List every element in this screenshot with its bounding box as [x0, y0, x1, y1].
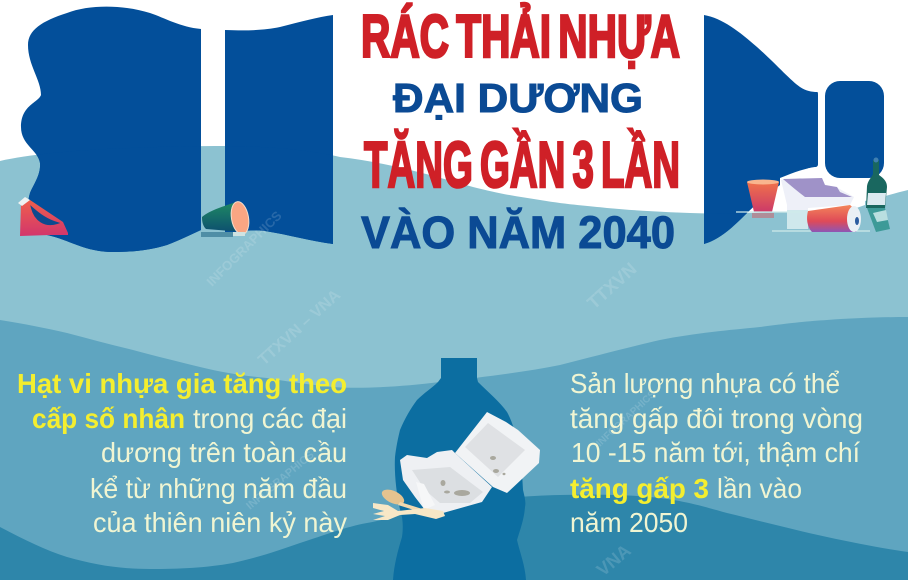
left text block: dương trên toàn cầu [101, 437, 347, 468]
icon: foam takeaway box with cutlery [373, 412, 540, 520]
right text block: tăng gấp đôi trong vòng [570, 403, 863, 434]
bottle cap [825, 81, 884, 178]
right text block: Sản lượng nhựa có thể [570, 368, 840, 399]
watermarks [204, 208, 658, 580]
box base [400, 450, 492, 513]
watermarks: INFOGRAPHICS [244, 449, 317, 512]
title line 2: ĐẠI DƯƠNG [393, 75, 643, 121]
left text block: Hạt vi nhựa gia tăng theo [17, 368, 347, 399]
title line 3: TĂNG GẦN 3 LẦN [364, 128, 680, 201]
left text block: của thiên niên kỷ này [93, 507, 347, 538]
mid water layer [0, 317, 908, 580]
right text block: tăng gấp 3 [570, 473, 709, 504]
watermarks: TTXVN – VNA [255, 286, 344, 369]
watermarks: INFOGRAPHICS [204, 208, 285, 289]
title line 1: RÁC THẢI NHỰA [361, 3, 680, 70]
icon: green cup on its side [201, 200, 251, 237]
left text block [17, 368, 347, 538]
icon: red plastic jug [18, 197, 68, 236]
right text block [570, 368, 863, 538]
deep water layer [0, 495, 908, 580]
bottle shoulder right segment [704, 15, 818, 244]
watermarks: TTXVN [583, 259, 641, 313]
watermarks: VNA [593, 540, 635, 580]
submerged bottle tone [28, 154, 747, 252]
spoon [380, 486, 432, 515]
green glass bottle [866, 158, 890, 232]
base interior [412, 467, 483, 503]
right text block: năm 2050 [570, 507, 688, 538]
bottle body left segment [21, 7, 201, 252]
lid interior [465, 423, 525, 477]
bottle silhouette: large cut-out bottle behind title [21, 7, 884, 252]
white halo behind trash [780, 167, 865, 212]
central bottle silhouette [393, 358, 526, 580]
fork [373, 503, 445, 520]
left text block: kể từ những năm đầu [90, 473, 347, 504]
food stains [440, 456, 506, 496]
right text block: 10 -15 năm tới, thậm chí [571, 437, 860, 468]
left text block: trong các đại [193, 403, 347, 434]
red cup [747, 180, 779, 218]
main title [361, 3, 680, 258]
fallen roll/can [807, 205, 861, 232]
watermarks: INFOGRAPHICS [595, 389, 658, 449]
title line 4: VÀO NĂM 2040 [361, 207, 675, 258]
left text block: cấp số nhân [32, 403, 185, 434]
foam box [781, 178, 854, 229]
water glints [736, 212, 870, 231]
icon: trash pile on the right [736, 158, 890, 232]
background: light water [0, 146, 908, 580]
inner flap [416, 482, 435, 510]
box lid [455, 412, 540, 493]
bottle body middle segment [225, 15, 333, 244]
right text block: lần vào [717, 473, 802, 504]
